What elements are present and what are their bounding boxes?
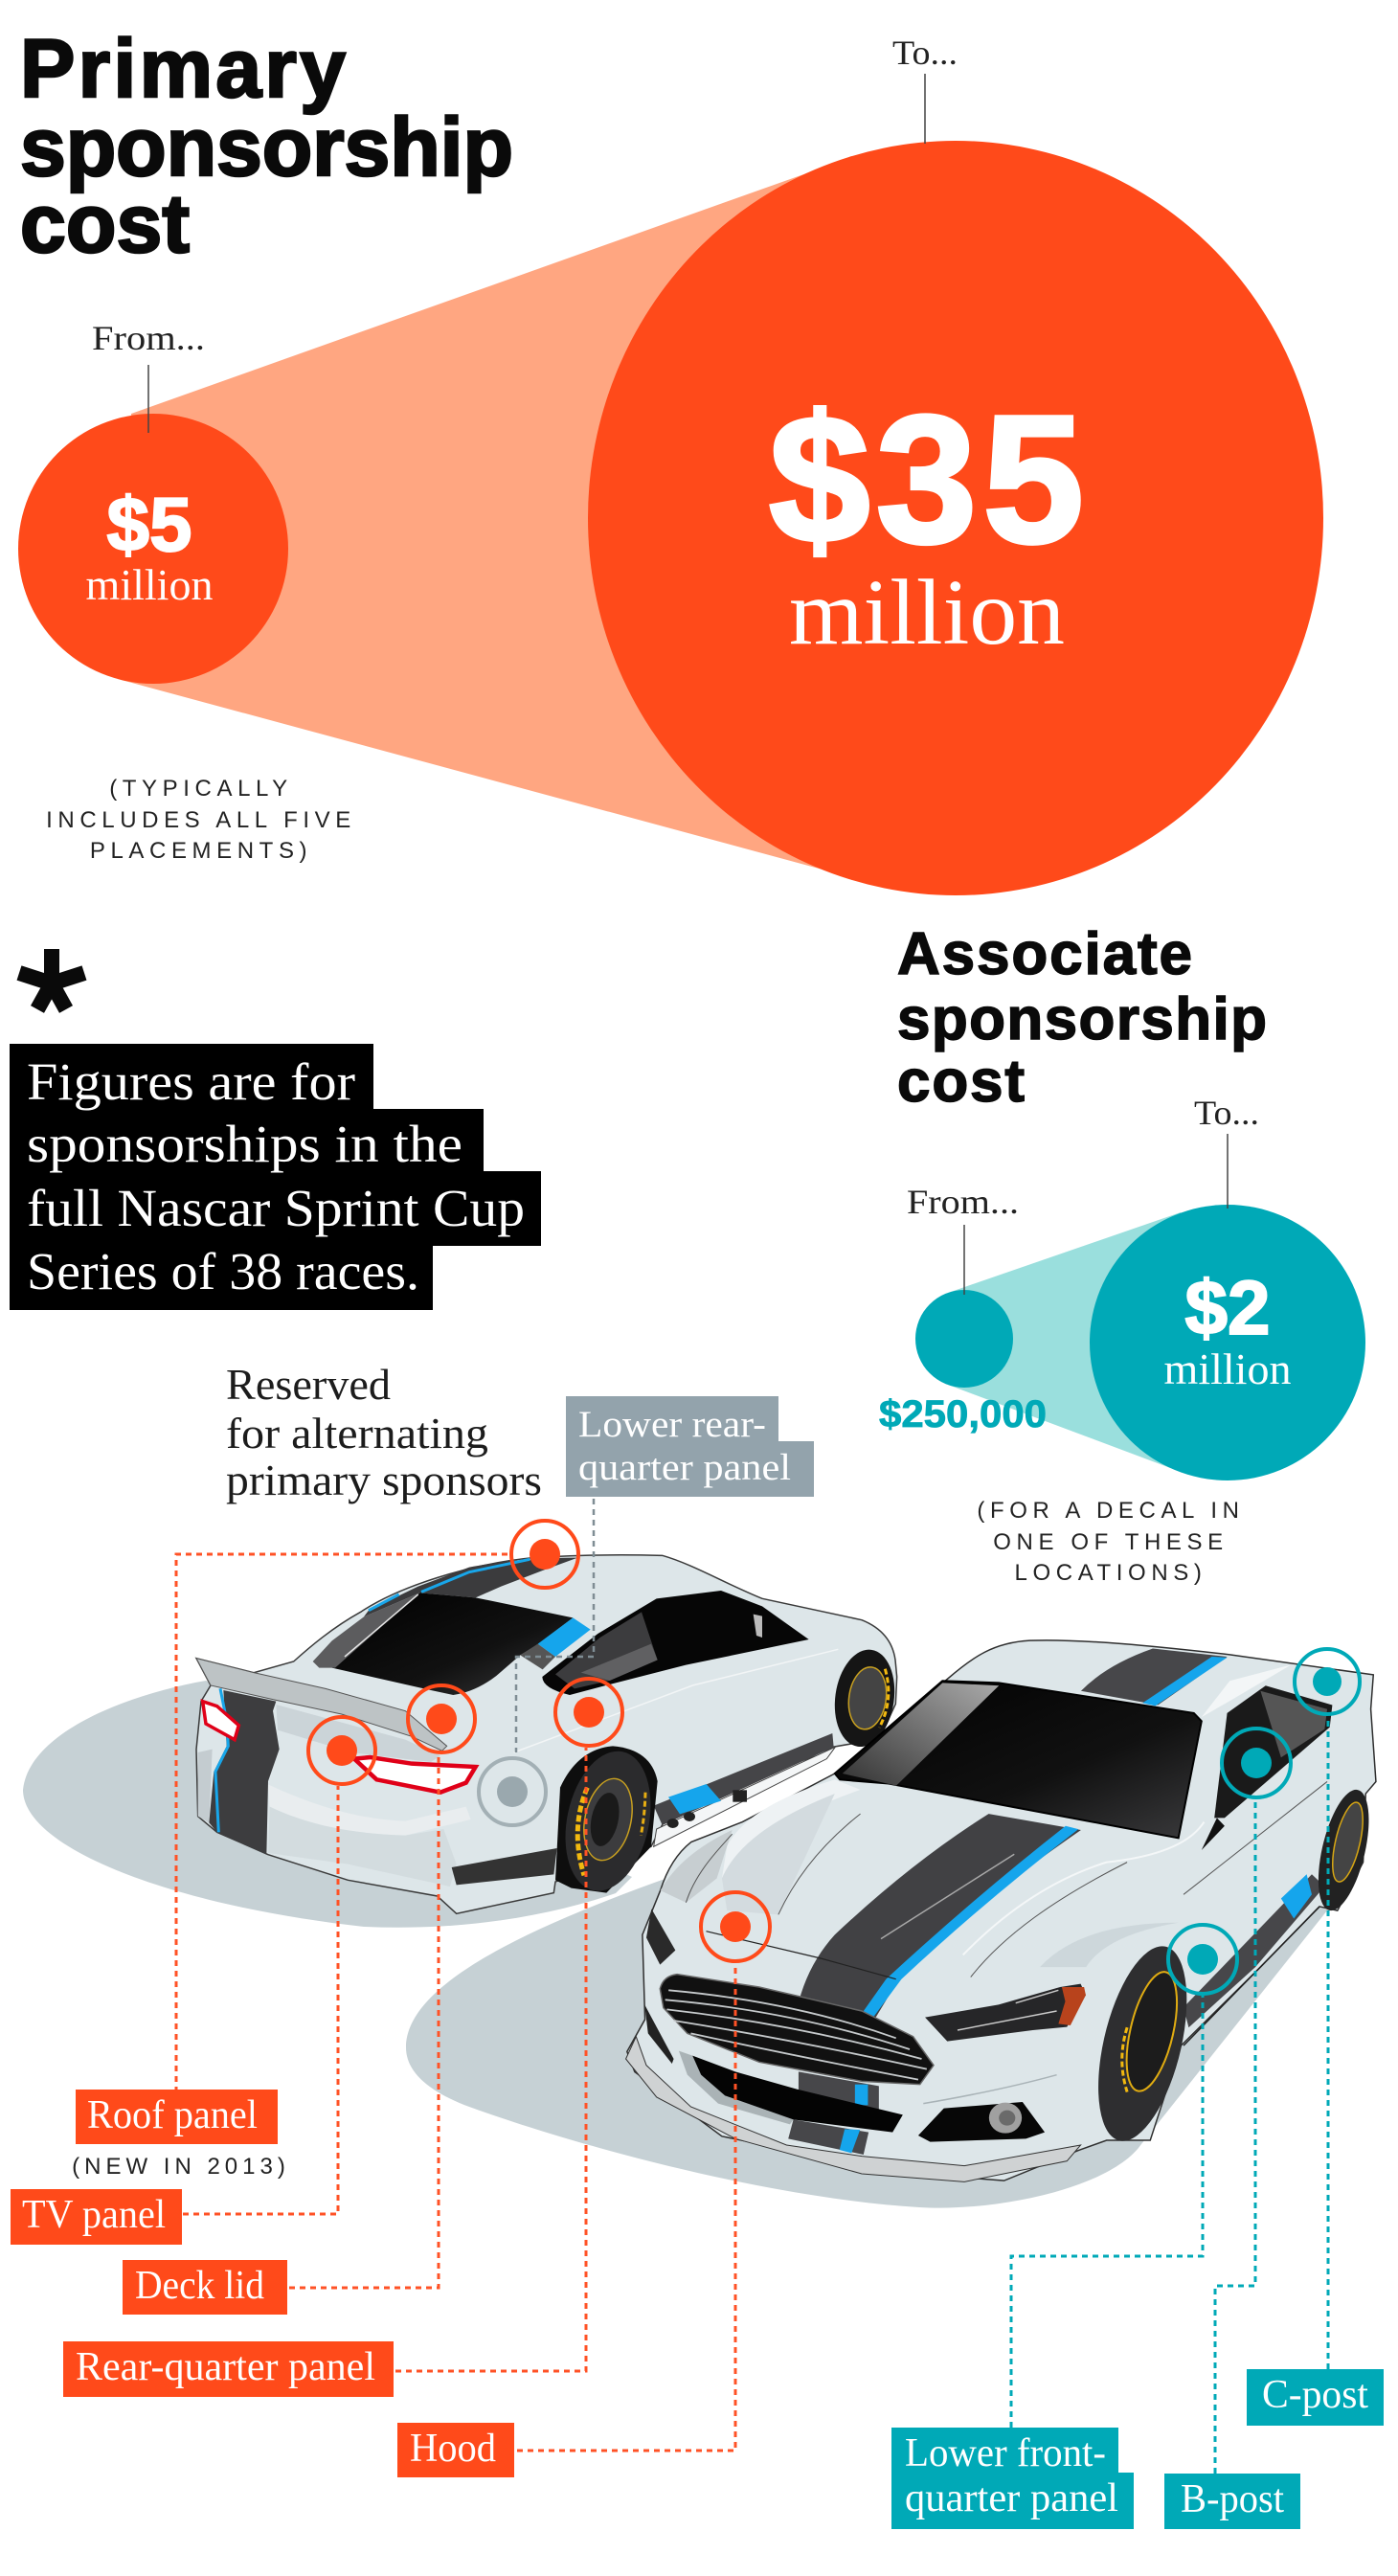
left side lights xyxy=(646,1909,675,1965)
circle: to $35 million xyxy=(588,141,1323,895)
target: roof panel xyxy=(511,1521,578,1588)
label: c-post xyxy=(1247,2369,1384,2426)
hood stripe xyxy=(799,1814,1081,2018)
front wheel xyxy=(1082,1941,1203,2146)
note: figures block: full Nascar Sprint Cup xyxy=(27,1179,525,1237)
front wheel xyxy=(829,1646,900,1751)
heading: associate sponsorship cost: sponsorship xyxy=(897,986,1267,1052)
target: c-post xyxy=(1295,1649,1360,1714)
cone between circles xyxy=(948,1212,1181,1472)
value: $5 million: million xyxy=(86,560,213,609)
value: $2 million: million xyxy=(1164,1344,1291,1393)
rear window xyxy=(332,1593,573,1695)
label: rear-quarter panel: Rear-quarter panel xyxy=(76,2345,375,2389)
title: primary sponsorship cost: cost xyxy=(20,178,190,270)
circle: to $2 million xyxy=(1090,1205,1365,1480)
side windows xyxy=(542,1591,809,1695)
caption: for a decal: LOCATIONS) xyxy=(1015,1560,1206,1586)
label: tv panel: TV panel xyxy=(22,2193,166,2237)
illustration: shadow of rear car xyxy=(23,1681,632,1928)
note: figures block: Figures are for xyxy=(27,1052,355,1111)
target: tv panel xyxy=(308,1717,375,1784)
note: figures block: sponsorships in the xyxy=(27,1115,462,1173)
headlight xyxy=(925,1984,1086,2042)
connector lines: associate xyxy=(1011,1717,1328,2474)
caption: for a decal: ONE OF THESE xyxy=(993,1529,1229,1555)
lower stripe xyxy=(788,2119,868,2155)
top stripe xyxy=(1081,1649,1228,1705)
label: to: To... xyxy=(892,34,958,72)
bumper shading xyxy=(679,2051,794,2124)
label: from: From... xyxy=(907,1183,1019,1221)
label: hood xyxy=(397,2423,514,2477)
label: from xyxy=(907,1183,1019,1295)
text: reserved for alternating primary sponsors: for alternating xyxy=(226,1409,488,1457)
label: to xyxy=(1194,1094,1259,1209)
heading: associate sponsorship cost: Associate xyxy=(897,921,1192,987)
car body xyxy=(196,1555,897,1913)
target: b-post xyxy=(1222,1729,1291,1797)
note: figures block xyxy=(10,1044,541,1310)
label: lower front-quarter panel: Lower front- xyxy=(905,2431,1106,2475)
label: to: To... xyxy=(1194,1094,1259,1132)
value: $2 million: $2 xyxy=(1185,1265,1270,1350)
label: tv panel xyxy=(11,2189,182,2245)
illustration: rear car xyxy=(196,1555,900,1913)
caption: typically includes all five placements: (TYPICALLY xyxy=(109,776,293,802)
body crease lines xyxy=(686,1781,1327,1977)
side skirt xyxy=(1184,1874,1324,2027)
rear stripe xyxy=(209,1690,280,1855)
label: c-post: C-post xyxy=(1262,2373,1368,2417)
label: lower front-quarter panel xyxy=(891,2428,1134,2529)
label: hood: Hood xyxy=(410,2427,496,2471)
icon: asterisk xyxy=(19,949,84,1009)
spoiler xyxy=(196,1659,447,1751)
bumper crease xyxy=(923,2075,1057,2104)
text: reserved for alternating primary sponsors: Reserved xyxy=(226,1360,391,1409)
value: $35 million: million xyxy=(789,561,1065,665)
lower rear bar xyxy=(452,1848,557,1885)
caption: typically includes all five placements: PLACEMENTS) xyxy=(90,838,312,864)
text: reserved for alternating primary sponsors: primary sponsors xyxy=(226,1456,542,1504)
left taillight xyxy=(203,1702,238,1740)
target: hood xyxy=(701,1892,770,1961)
label: from: From... xyxy=(92,319,205,357)
roof stripe xyxy=(364,1558,577,1616)
chart: associate sponsorship cone xyxy=(879,1094,1365,1586)
caption: for a decal xyxy=(977,1498,1245,1586)
value: $2 million xyxy=(1164,1265,1291,1393)
label: b-post: B-post xyxy=(1181,2477,1284,2521)
windshield xyxy=(835,1681,1202,1838)
target: deck lid xyxy=(408,1685,475,1752)
label: lower rear-quarter panel: quarter panel xyxy=(578,1447,791,1488)
heading: associate sponsorship cost: cost xyxy=(897,1049,1025,1115)
label: roof panel: Roof panel xyxy=(87,2093,258,2137)
note: figures block: Series of 38 races. xyxy=(27,1242,419,1300)
fog light xyxy=(918,2102,1045,2142)
circle: from $5 million xyxy=(18,414,288,684)
rear wheel xyxy=(553,1743,663,1899)
label: lower rear-quarter panel xyxy=(566,1396,814,1497)
label: lower rear-quarter panel: Lower rear- xyxy=(578,1404,766,1445)
chart: primary sponsorship cone xyxy=(18,34,1323,895)
connector line: lower rear-quarter xyxy=(516,1499,594,1752)
connector lines: primary xyxy=(176,1554,735,2451)
caption: typically includes all five placements: INCLUDES ALL FIVE xyxy=(46,807,356,833)
illustration: front car nose xyxy=(626,1909,1086,2181)
title: primary sponsorship cost: Primary xyxy=(20,23,346,115)
caption: typically includes all five placements xyxy=(46,776,356,864)
center stripe under grille xyxy=(799,2071,879,2110)
value: $35 million: $35 xyxy=(769,378,1084,581)
cone between circles xyxy=(118,172,858,879)
caption: for a decal: (FOR A DECAL IN xyxy=(977,1498,1245,1524)
illustration: front car xyxy=(627,1640,1378,2181)
blue roof block xyxy=(538,1617,591,1657)
bumper opening xyxy=(692,2056,903,2133)
label: deck lid: Deck lid xyxy=(135,2264,264,2308)
splitter xyxy=(626,2037,1081,2181)
label: lower front-quarter panel: quarter panel xyxy=(905,2476,1118,2520)
target: rear-quarter panel xyxy=(555,1679,622,1746)
caption: new in 2013: (NEW IN 2013) xyxy=(72,2154,290,2180)
label: deck lid xyxy=(123,2260,287,2315)
side skirt xyxy=(654,1733,834,1825)
label: b-post xyxy=(1164,2474,1300,2529)
car body xyxy=(627,1640,1376,2181)
hood seam xyxy=(706,1932,896,1979)
hood highlights xyxy=(722,1779,861,1878)
value: $5 million: $5 xyxy=(107,482,192,567)
heading: associate sponsorship cost xyxy=(897,921,1267,1115)
text: reserved for alternating primary sponsors xyxy=(226,1360,542,1504)
value: $250,000: $250,000 xyxy=(879,1393,1047,1435)
title: primary sponsorship cost xyxy=(20,23,513,270)
side window xyxy=(1214,1685,1332,1818)
right taillight xyxy=(354,1757,476,1793)
label: from xyxy=(92,319,205,433)
target: lower front-quarter panel xyxy=(1168,1925,1237,1994)
value: $5 million xyxy=(86,482,213,609)
circle: from $250,000 xyxy=(915,1290,1013,1388)
label: to xyxy=(892,34,958,144)
grille xyxy=(660,1975,934,2085)
title: primary sponsorship cost: sponsorship xyxy=(20,102,513,193)
lower body shading xyxy=(268,1784,471,1836)
target: lower rear-quarter panel xyxy=(479,1758,546,1825)
illustration: shadow of front car xyxy=(406,1877,1331,2208)
rear wheel xyxy=(1309,1787,1378,1913)
